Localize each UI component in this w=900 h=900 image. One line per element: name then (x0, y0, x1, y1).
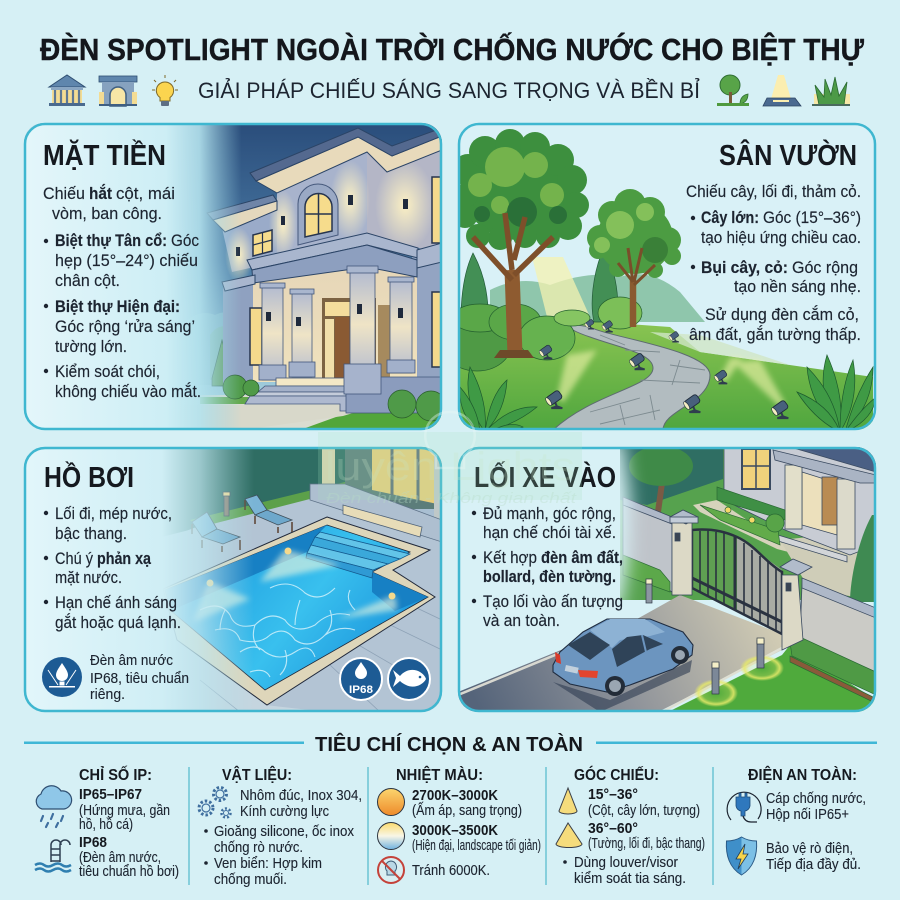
car (553, 619, 693, 712)
column: chỉ số IP (35, 764, 179, 880)
text: facade notes: Góc rộng ‘rửa sáng’ (55, 317, 195, 336)
loungers (192, 492, 292, 552)
watermark: luyên Lights (325, 445, 575, 489)
text fade (26, 449, 250, 712)
column: vật liệu: chống rò nước. (214, 840, 303, 856)
column: điện an toàn: Hộp nối IP65+ (766, 807, 849, 823)
column: nhiệt màu: (Ấm áp, sang trọng) (412, 802, 522, 819)
icon: narrow beam (559, 788, 577, 814)
badge: IP68: IP68 (349, 684, 373, 696)
path (553, 323, 710, 430)
plants (460, 355, 876, 433)
illustration: villa facade (200, 128, 442, 430)
text: driveway notes: bollard, đèn tường. (483, 567, 616, 586)
hedge (172, 449, 345, 534)
illustration: pool (150, 447, 442, 712)
column: chỉ số IP: tiêu chuẩn hồ bơi) (79, 864, 179, 880)
heading: mặt tiền: MẶT TIỀN (43, 138, 166, 172)
text: driveway notes (472, 504, 623, 630)
icon: wide beam (556, 823, 582, 848)
caustics (200, 584, 355, 677)
icon: light bulb (152, 75, 178, 106)
text: pool notes (44, 504, 181, 632)
text: facade notes: Biệt thự Tân cổ: (55, 231, 167, 250)
text: facade notes: chân cột. (55, 271, 120, 290)
text: pool notes: phản xạ (97, 549, 151, 568)
text: pool notes: Hạn chế ánh sáng (55, 593, 177, 612)
text: underwater light note: riêng. (90, 687, 125, 703)
text: pool notes: gắt hoặc quá lạnh. (55, 613, 181, 632)
hedge and bush (700, 487, 785, 545)
illustration: driveway and gate (458, 446, 876, 712)
roof cornice (207, 128, 442, 232)
text: driveway notes: hạn chế chói tài xế. (483, 523, 616, 542)
patio deck (172, 499, 440, 710)
text: pool notes: bậc thang. (55, 524, 127, 543)
text: garden notes: Chiếu cây, lối đi, thảm cỏ. (686, 182, 861, 201)
text: driveway notes: và an toàn. (483, 611, 560, 630)
text: underwater light note (90, 653, 189, 703)
text: garden notes (686, 182, 861, 344)
text: facade notes (43, 184, 201, 401)
column: chỉ số IP: IP68 (79, 834, 107, 851)
column: nhiệt màu: 3000K–3500K (412, 822, 498, 839)
gate pillars (670, 510, 812, 650)
background cypress trees (460, 252, 618, 322)
text: facade notes: Kiểm soát chói, (55, 362, 160, 381)
text: facade notes: Chiếu (43, 184, 85, 203)
column: nhiệt màu: NHIỆT MÀU: (396, 765, 483, 784)
icon: no cold bulb (378, 857, 404, 883)
icon: underwater light badge (42, 657, 82, 697)
column: vật liệu: Ven biển: Hợp kim (214, 856, 322, 872)
column: góc chiếu: Dùng louver/visor (574, 855, 678, 871)
watermark (318, 412, 582, 507)
water (165, 525, 428, 690)
badge: fish (388, 658, 430, 700)
section heading: tiêu chí: TIÊU CHÍ CHỌN & AN TOÀN (315, 732, 583, 756)
icon: warm colour (378, 788, 404, 816)
columns (259, 266, 415, 380)
column: điện an toàn: Cáp chống nước, (766, 791, 866, 807)
column: điện an toàn: Tiếp địa đầy đủ. (766, 857, 861, 873)
pool wall (174, 525, 327, 596)
column: nhiệt màu (378, 765, 541, 883)
icon: rain cloud (36, 786, 72, 827)
underwater light beams (193, 551, 397, 622)
subtitle: GIẢI PHÁP CHIẾU SÁNG SANG TRỌNG VÀ BỀN BỈ (198, 78, 700, 103)
text: facade notes: Góc (171, 231, 199, 250)
yard (620, 447, 876, 600)
text: underwater light note: IP68, tiêu chuẩn (90, 671, 189, 687)
column: nhiệt màu: (Hiện đại, landscape tối giản) (412, 838, 541, 854)
text: facade notes: Biệt thự Hiện đại: (55, 297, 180, 316)
column: vật liệu: Nhôm đúc, Inox 304, (240, 788, 362, 804)
column: góc chiếu: (Tường, lối đi, bậc thang) (588, 836, 705, 852)
text: facade notes: không chiếu vào mắt. (55, 382, 201, 401)
column: chỉ số IP: CHỈ SỐ IP: (79, 764, 152, 784)
house (724, 447, 876, 562)
text: driveway notes: Kết hợp (483, 548, 537, 567)
heading: sân vườn: SÂN VƯỜN (719, 138, 857, 172)
lawn (458, 318, 873, 430)
icon: grass (812, 77, 850, 106)
grass light beams (557, 350, 785, 407)
steps (245, 364, 442, 413)
column: góc chiếu: 15°–36° (588, 786, 638, 803)
text: garden notes: tạo nền sáng nhẹ. (734, 277, 861, 296)
icon: neutral colour (378, 822, 404, 850)
text: pool notes: mặt nước. (55, 568, 122, 587)
column: góc chiếu (556, 765, 705, 887)
column: chỉ số IP: IP65–IP67 (79, 786, 142, 803)
column: chỉ số IP: (Đèn âm nước, (79, 850, 161, 866)
column: điện an toàn: Bảo vệ rò điện, (766, 841, 853, 857)
icon: pool ladder (35, 840, 71, 872)
watermark: Đèn chuẩn - Không gian chất (326, 490, 577, 507)
terrace and columns (310, 447, 442, 542)
text: garden notes: âm đất, gắn tường thấp. (689, 325, 861, 344)
column: góc chiếu: GÓC CHIẾU: (574, 765, 659, 784)
text: facade notes: hắt (89, 184, 112, 203)
pool steps (306, 532, 410, 578)
text: garden notes: Góc (15°–36°) (763, 208, 861, 227)
icon: safety shield (726, 837, 757, 875)
bushes (443, 297, 642, 371)
wall lamps (236, 195, 408, 326)
tree: big (452, 129, 589, 358)
text: facade notes: cột, mái (116, 184, 175, 203)
column: điện an toàn (726, 765, 866, 875)
bushes (223, 375, 446, 421)
driveway (458, 595, 782, 712)
column: vật liệu: Gioăng silicone, ốc inox (214, 824, 355, 840)
text: pool notes: Lối đi, mép nước, (55, 504, 172, 523)
text: garden notes: Góc rộng (792, 258, 858, 277)
text fade (24, 123, 239, 428)
column: nhiệt màu: Tránh 6000K. (412, 863, 490, 879)
bollards (646, 579, 764, 694)
text: pool notes: Chú ý (55, 549, 93, 568)
text: garden notes: Cây lớn: (701, 208, 759, 227)
text: driveway notes: Tạo lối vào ấn tượng (483, 592, 623, 611)
panel: lối xe vào (440, 440, 876, 712)
panel: hồ bơi (24, 447, 442, 712)
column: điện an toàn: ĐIỆN AN TOÀN: (748, 765, 857, 784)
heading: lối xe vào: LỐI XE VÀO (474, 460, 616, 494)
gate (692, 530, 782, 634)
text: garden notes: Bụi cây, cỏ: (701, 258, 788, 277)
lawn (668, 645, 876, 712)
icon: waterproof plug (727, 792, 761, 822)
light beam (532, 257, 590, 317)
icon: villa arch (99, 76, 137, 106)
hedges (623, 555, 876, 702)
perimeter wall (623, 497, 876, 672)
text: facade notes: tường lớn. (55, 337, 127, 356)
column: vật liệu: chống muối. (214, 872, 287, 888)
illustration: garden (443, 129, 876, 433)
panel: sân vườn (443, 123, 876, 433)
upper wall glows (225, 159, 435, 283)
pool lights (206, 548, 396, 600)
icon: tree (717, 75, 749, 106)
heading: hồ bơi: HỒ BƠI (44, 460, 134, 494)
icon: classical temple (49, 75, 85, 106)
icon: gears (199, 788, 230, 818)
text: garden notes: tạo hiệu ứng chiều cao. (701, 228, 861, 247)
column: chỉ số IP: (Hứng mưa, gần (79, 803, 170, 819)
tree: small (587, 189, 681, 327)
column: góc chiếu: kiểm soát tia sáng. (574, 871, 686, 887)
column: vật liệu: Kính cường lực (240, 804, 329, 820)
balcony slab (222, 233, 442, 291)
column: vật liệu: VẬT LIỆU: (222, 765, 292, 784)
text: driveway notes: Đủ mạnh, góc rộng, (483, 504, 616, 523)
column: nhiệt màu: 2700K–3000K (412, 787, 498, 804)
garden spotlights (538, 319, 789, 418)
text: facade notes: hẹp (15°–24°) chiếu (55, 251, 198, 270)
text fade (440, 440, 630, 680)
text: underwater light note: Đèn âm nước (90, 653, 173, 669)
column: chỉ số IP: hồ, hồ cá) (79, 817, 133, 833)
pool coping (163, 517, 435, 705)
icon: in-ground light (763, 75, 801, 106)
panel: mặt tiền (24, 123, 446, 431)
column: góc chiếu: (Cột, cây lớn, tượng) (588, 803, 700, 819)
text: garden notes: Sử dụng đèn cắm cỏ, (705, 305, 859, 324)
tree (629, 446, 693, 512)
column: góc chiếu: 36°–60° (588, 820, 638, 837)
text: facade notes: vòm, ban công. (52, 204, 162, 223)
column: vật liệu (199, 765, 362, 888)
badge: IP68 (340, 658, 382, 700)
arched window (298, 184, 338, 245)
text: driveway notes: đèn âm đất, (541, 548, 623, 567)
